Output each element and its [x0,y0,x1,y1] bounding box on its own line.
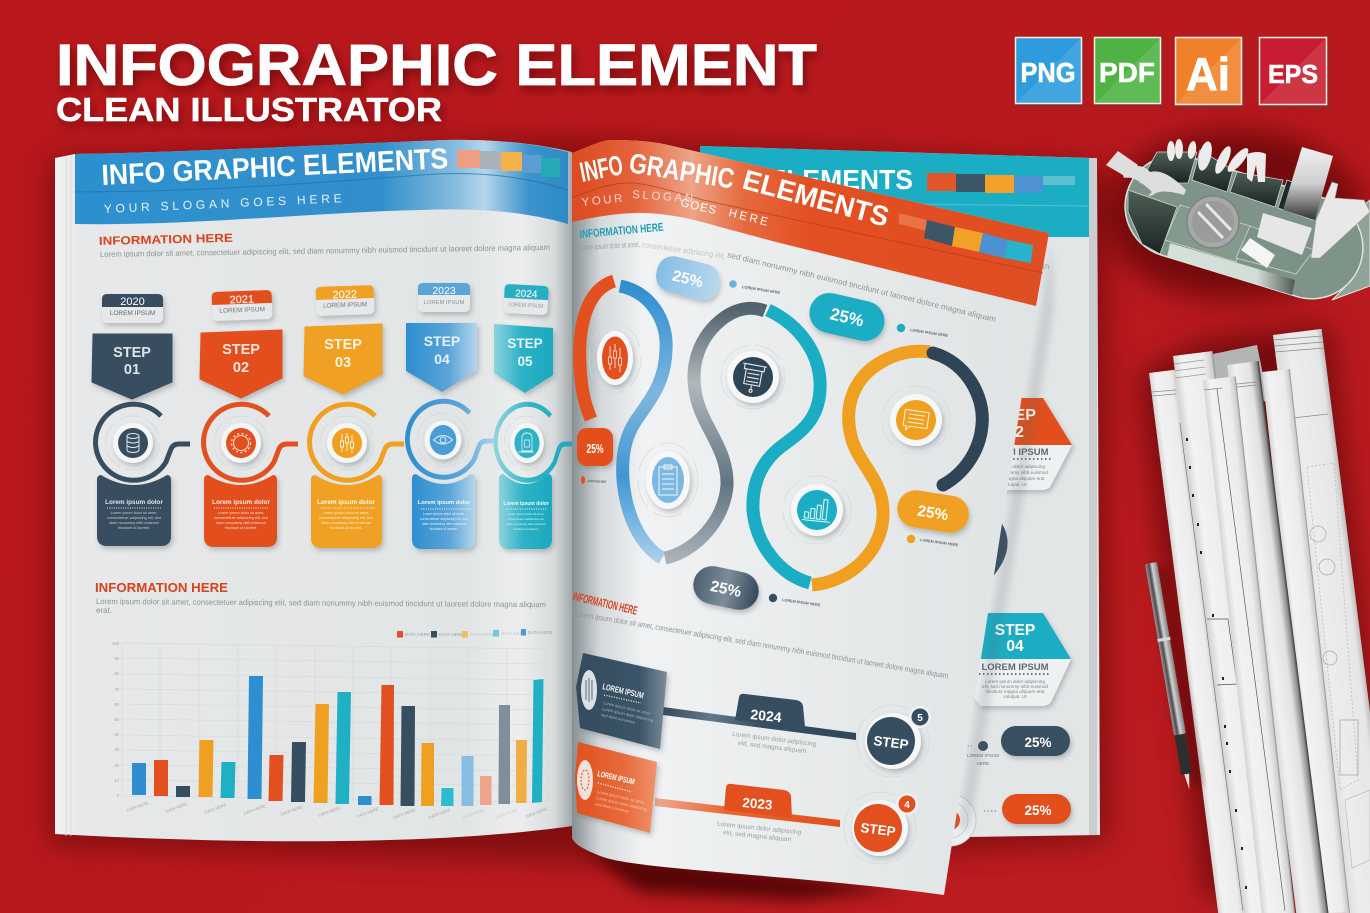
roll A bands [1151,390,1176,396]
step column 5 [494,284,575,549]
x axis labels: DATA HERE [428,807,451,820]
year tag 2021: LOREM IPSUM [219,306,265,315]
section heading one: INFORMATION HERE [99,231,233,248]
hub: bar chart [783,476,851,544]
text card: Lorem ipsum dolor [503,501,549,507]
year tag 2022: LOREM IPSUM [323,301,367,310]
page sheet [700,146,1100,838]
chart legend: DATA HERE [439,632,464,637]
roll C [1203,376,1295,913]
text card: Lorem ipsum dolor sit amet, [323,511,369,515]
section text one: Lorem ipsum dolor sit amet, consectetuer adipiscing elit, sed diam nonummy nibh euismod tincidunt ut laoreet dolore magna aliquam [100,243,550,259]
caption: elit, sed magna aliquam [723,829,792,844]
text card: Lorem ipsum dolor sit amet, [423,512,465,516]
x axis labels: DATA HERE [165,801,188,814]
ring icon: sliders [310,404,404,480]
marker: dark dot and label [964,741,999,766]
card: step 04: volutpat. Ut [1003,694,1027,699]
text card: consectetuer adipiscing elit, [508,517,545,521]
label: orange marker [907,535,959,547]
step arrow 04: STEP [424,333,460,349]
dark ring fragment [960,518,1008,584]
badge: Ai [1176,38,1242,104]
text card: consectetuer adipiscing elit, sed [107,516,161,520]
y axis labels: 70 [114,687,120,692]
chart legend: DATA HERE [501,631,526,636]
roll A [1149,369,1246,913]
chart legend: DATA HERE [405,632,430,637]
year tag 2023 [418,283,470,312]
y axis labels: 30 [114,747,120,752]
x axis labels: DATA HERE [462,807,485,820]
x axis labels: DATA HERE [280,804,303,817]
card: step 02 [958,398,1072,490]
banner slogan: YOUR [581,192,627,209]
badge: PDF: PDF [1099,57,1155,88]
text card: tincidunt ut laoreet. [513,527,539,531]
text card [412,474,475,549]
card: step 04: elit, sed nonummy nibh euismod [982,684,1048,689]
y axis labels: 90 [114,656,120,661]
card: step 04: LOREM IPSUM [981,662,1049,673]
section text: sed diam nonummy nibh euismod tincidunt ut laoreet dolore magna aliquam [727,250,997,324]
x axis labels: DATA HERE [318,805,341,818]
pen grip [1175,734,1192,775]
text card: Lorem ipsum dolor [212,499,270,506]
year tag 2021 [212,290,273,321]
hub: speech bubble [882,386,950,454]
page edge shadow [958,240,1054,828]
card: step 02: Lorem ipsum dolor adipiscing [985,464,1045,469]
step arrow 04: 04 [434,351,450,367]
pale strip compartment [1167,243,1295,295]
y axis labels: 80 [114,671,120,676]
roll D [1227,361,1328,913]
y axis labels: 40 [114,732,120,737]
hub: clipboard [638,443,698,517]
text card: diam nonummy nibh euismod [216,521,266,525]
pen barrel [1145,562,1186,736]
round lid [1187,196,1239,248]
step badge: 5 [917,713,923,724]
front page (right sheet) [571,140,1054,895]
info card: Lorem ipsum dolor sit amet [603,700,652,716]
card: step 04: STEP [995,622,1035,639]
year tag 2024: 2024 [515,288,538,301]
connector line [655,798,840,827]
grid lines [122,643,547,804]
badge: PNG: PNG [1020,57,1076,88]
text card [97,475,171,546]
info card: sed diam nonummy [601,712,636,725]
step arrow 02: 02 [233,360,249,376]
section text: consectetuer adipiscing elit, [642,240,726,261]
text card: consectetuer adipiscing elit, sed [420,517,468,521]
step column 4 [406,283,497,549]
colour swatches [899,213,1033,263]
roll E [1262,369,1350,913]
banner slogan: HERE [727,207,773,230]
ring fragment with dots [924,794,996,846]
orange banner [572,140,1049,306]
section text two [96,597,546,615]
step arrow 04 [406,323,477,392]
pen ring [1157,637,1171,642]
back page small text: am [1038,262,1049,271]
y axis labels: 0 [117,793,120,798]
card: step 04: Lorem ipsum dolor adipiscing [985,679,1045,684]
step circle [844,792,916,864]
segment: orange wave [812,351,930,585]
text card: diam nonummy nibh euismod [109,521,159,525]
text card: consectetuer adipiscing elit, sed [214,516,268,520]
year tag 2023: 2023 [432,285,456,297]
label: red marker [581,476,607,484]
x axis labels: DATA HERE [356,806,379,819]
pill: orange 25%: 25% [1024,803,1052,818]
badge: EPS [1260,38,1326,104]
y axis labels: 100 [112,641,120,646]
y axis labels: 20 [114,763,120,768]
segment: blue wave [620,286,666,558]
banner heading: INFO GRAPHIC ELEMENTS [568,164,913,195]
roll B [1173,351,1284,913]
x axis labels [126,800,548,820]
step badge [909,706,931,728]
pen tip [1184,774,1192,790]
step circle: STEP [873,733,909,752]
label: blue marker [729,280,781,295]
text card: tincidunt ut laoreet. [225,526,257,530]
back sheet [1203,345,1268,420]
year tag 2020: 2020 [120,296,145,308]
pill: blue 25% [653,253,723,303]
banner slogan: SLOGAN [632,189,697,206]
chart legend: DATA HERE [528,630,553,635]
step badge: 4 [904,800,910,811]
text card [499,474,552,549]
info card [576,653,667,749]
file format badges [1016,38,1326,104]
sub heading: CLEAN ILLUSTRATOR [56,91,442,128]
x axis labels: DATA HERE [204,802,227,815]
colour swatches [927,173,1075,193]
segment: red arc [580,281,614,419]
ring icon: database [96,404,190,480]
info card: Lorem ipsum dolor adipiscing [596,795,648,812]
banner slogan: GOES [679,197,721,218]
info card: LOREM IPSUM [597,769,636,787]
section text: Lorem ipsum dolor sit amet, [580,240,640,252]
finger like white items [1167,139,1266,182]
marker: dark dot and label: LOREM IPSUM [967,753,999,758]
main heading: INFOGRAPHIC ELEMENT [56,33,817,98]
banner slogan: YOUR SLOGAN GOES HERE [104,191,347,216]
text card: Lorem ipsum dolor [317,499,375,506]
timeline row: 2023 [575,742,918,864]
title [56,33,817,128]
text card: tincidunt ut laoreet. [430,527,458,531]
x axis labels: DATA HERE [243,803,266,816]
year tab: 2024 [750,706,783,725]
pill: red 25% [577,428,613,466]
step arrow 01: 01 [124,362,140,378]
card: step 04: 04 [1006,638,1024,655]
step arrow 02 [200,330,282,398]
section text two: erat. [96,606,112,615]
card: step 02: LOREM IPSUM [981,447,1049,458]
pill: teal 25% [805,289,889,345]
step arrow 05: 05 [517,354,533,369]
ring icon: document [496,404,575,480]
pill: dark 25%: 25% [1024,735,1052,750]
step arrow 03 [304,324,382,394]
caption: Lorem ipsum dolor adipiscing [717,821,802,836]
text card: diam nonummy nibh euismod [422,522,466,526]
text card: Lorem ipsum dolor [418,500,471,506]
snake diagram [580,281,982,585]
tray body [1112,143,1370,311]
step column 2 [200,290,298,547]
banner slogan [581,189,773,230]
badge: PNG [1016,38,1082,104]
label: dark marker: LOREM IPSUM HERE [782,598,821,607]
text card: diam nonummy nibh euismod [321,521,371,525]
pen [1145,560,1204,791]
label: teal marker: LOREM IPSUM HERE [910,328,949,338]
text card: tincidunt ut laoreet. [330,526,362,530]
segment: grey wave [665,308,765,558]
info card: Lorem ipsum dolor sit amet [597,789,646,805]
ring icon: eye [407,401,497,477]
step badge [896,793,918,815]
section heading: INFORMATION HERE [579,222,664,241]
pill: orange 25%: 25% [916,503,950,524]
pill: blue 25%: 25% [671,267,705,292]
pill: orange 25% [895,488,972,535]
card: step 04: tincidunt magna aliquam erat [986,689,1045,694]
white binder clip [1106,151,1186,196]
card: step 02: 02 [1006,424,1024,441]
rolled blueprints [1140,325,1370,913]
text card: Lorem ipsum dolor [105,499,163,506]
colour swatches [457,150,560,177]
section heading two: INFORMATION HERE [95,581,228,595]
text card: Lorem ipsum dolor sit amet, [507,512,545,516]
card: step 02: elit, sed nonummy nibh euismod [982,470,1048,475]
text card: consectetuer adipiscing elit, sed [319,516,373,520]
label: orange marker: LOREM IPSUM HERE [920,538,959,547]
banner heading middle word: GRAPHIC [627,147,737,195]
banner heading: INFO GRAPHIC ELEMENTS [101,143,449,192]
step arrow 01: STEP [113,345,151,361]
pill: orange 25% [1002,794,1071,824]
desk organizer tray [1105,130,1370,311]
pill: red 25%: 25% [586,442,604,456]
y axis labels [112,641,120,798]
compartments [1128,150,1314,274]
x axis labels: DATA HERE [126,800,149,813]
info card: LOREM IPSUM [602,681,645,700]
connector line [663,707,856,740]
text card: diam nonummy nibh euismod [506,522,546,526]
pill: dark 25% [1001,726,1070,756]
white scissors [1311,182,1370,258]
pill: dark 25% [690,563,762,613]
x axis labels: DATA HERE [525,806,548,819]
year tab [735,694,805,727]
x axis labels: DATA HERE [495,807,518,820]
banner heading last word: ELEMENTS [739,164,892,233]
step arrow 05 [494,324,553,393]
year tag 2023: LOREM IPSUM [424,300,464,306]
badge: Ai: Ai [1186,48,1230,100]
section heading two: INFORMATION HERE [571,589,639,618]
blue banner [75,140,568,224]
hub: presentation screen [721,345,785,409]
label: teal marker [897,324,949,338]
pill: dark 25%: 25% [709,578,743,601]
step column 3 [304,285,404,548]
section text [580,240,997,324]
back page (right) [568,146,1100,846]
left page [55,140,575,841]
segment: teal wave [753,310,820,583]
small white card [1241,238,1275,268]
step arrow 03: STEP [324,337,362,353]
text card: tincidunt ut laoreet. [118,526,150,530]
section text two: Lorem ipsum dolor sit amet, consectetuer adipiscing elit, sed diam nonummy nibh euismod tincidunt ut laoreet dolore magna aliquam [575,609,949,680]
info card [575,742,657,833]
year tab [724,784,792,818]
page sheet [55,140,572,841]
year tag 2020: LOREM IPSUM [110,310,155,317]
chart legend [397,629,553,638]
roll F [1273,329,1370,913]
info card: sed diam nonummy [595,801,630,814]
year tag 2020 [102,294,163,323]
x axis labels: DATA HERE [393,807,416,820]
year tag 2022: 2022 [332,289,357,301]
step arrow 03: 03 [335,355,351,371]
label: red marker: LOREM IPSUM HERE [587,479,607,484]
text card: Lorem ipsum dolor sit amet, [218,511,264,515]
text card [311,475,382,548]
hub: red sliders [589,323,641,393]
year tag 2022 [316,285,375,316]
y axis labels: 60 [114,702,120,707]
step circle: STEP [860,820,896,839]
page sheet [572,140,1049,895]
year tag 2024: LOREM IPSUM [508,302,543,310]
step column 1 [92,294,190,546]
info card: Lorem ipsum dolor adipiscing [602,706,654,723]
step arrow 01 [92,334,172,399]
text card [204,475,277,547]
bar chart [112,629,553,820]
timeline row: 2024 [576,653,931,777]
bars [132,676,544,806]
step arrow 02: STEP [222,342,260,358]
label: blue marker: LOREM IPSUM HERE [742,285,781,295]
year tag 2024 [503,284,549,315]
chart legend: DATA HERE [470,632,495,637]
caption: Lorem ipsum dolor adipiscing [732,731,817,748]
ring icon: gear [204,404,298,480]
grey paper block [1283,147,1333,220]
teal banner [700,146,1089,237]
badge: EPS: EPS [1268,59,1318,89]
badge: PDF [1094,38,1160,104]
y axis labels: 50 [114,717,120,722]
caption [717,821,802,844]
step circle [857,705,929,777]
y axis labels: 10 [114,778,120,783]
pill: teal 25%: 25% [828,304,866,331]
text card: Lorem ipsum dolor sit amet, [111,511,157,515]
section text two: Lorem ipsum dolor sit amet, consectetuer adipiscing elit, sed diam nonummy nibh euismod tincidunt ut laoreet dolore magna aliquam [96,597,546,609]
card: step 02: tincidunt magna aliquam erat [986,476,1045,481]
second tray piece [1332,200,1370,300]
card: step 02: STEP [994,407,1036,424]
segment: dark arc [933,353,982,485]
marker: dark dot and label: HERE [977,761,989,766]
white block [1257,213,1312,255]
step arrow 05: STEP [507,336,543,351]
card: step 02: volutpat. Ut [1003,482,1027,487]
banner heading: INFO [577,149,625,188]
card: step 04 [957,613,1071,706]
year tag 2021: 2021 [229,294,254,306]
year tab: 2023 [742,795,773,813]
caption: elit, sed magna aliquam [738,740,807,755]
label: dark marker [769,594,821,607]
page drop shadows [50,140,1108,900]
